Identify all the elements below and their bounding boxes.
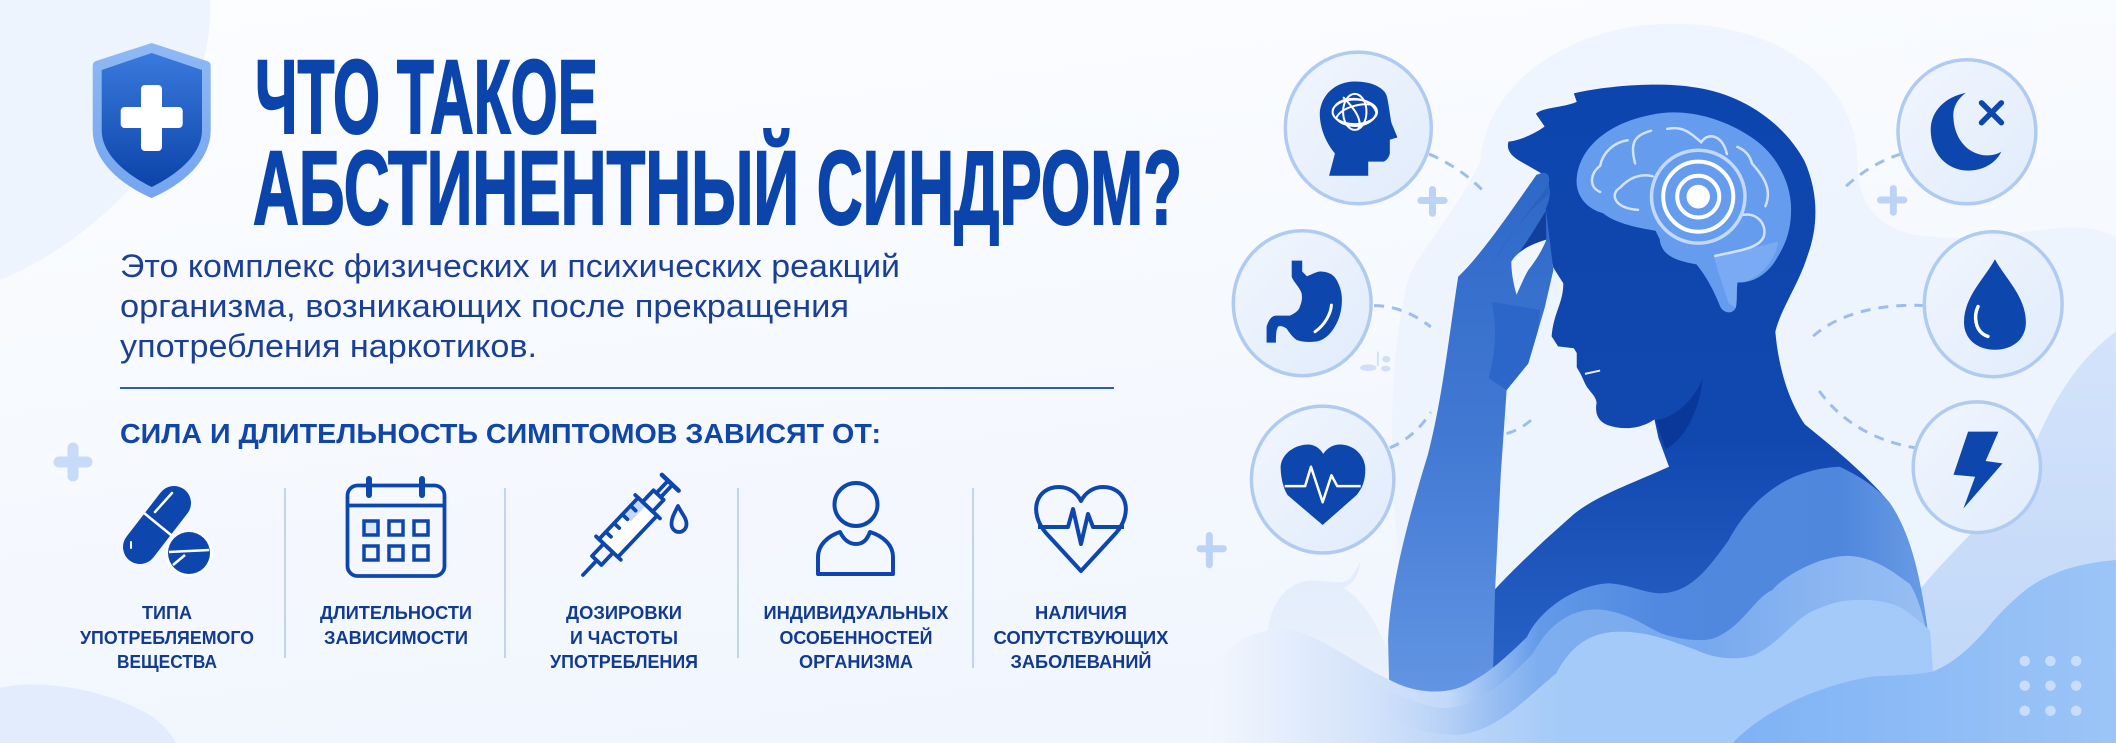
decorative plus left	[59, 448, 87, 476]
front wave right	[1733, 560, 2116, 743]
decorative plus marks	[1200, 189, 1904, 565]
label	[994, 602, 1169, 672]
icon: shield with medical cross	[93, 43, 211, 198]
pain target rings	[1652, 150, 1745, 243]
label: ОСОБЕННОСТЕЙ	[780, 627, 932, 648]
background wave left	[1267, 559, 1399, 743]
title: АБСТИНЕНТНЫЙ СИНДРОМ?	[253, 128, 1182, 247]
title: ЧТО ТАКОЕ	[255, 39, 598, 156]
label: УПОТРЕБЛЕНИЯ	[550, 651, 698, 672]
background blob: top left	[0, 0, 210, 280]
symptom: stomach	[1233, 231, 1371, 376]
icon: calendar	[347, 479, 445, 576]
background wave right	[1901, 332, 2116, 743]
icon: heart with pulse	[1036, 487, 1126, 571]
label	[80, 602, 254, 672]
dashed connectors	[1374, 154, 1924, 448]
label: ЗАВИСИМОСТИ	[324, 627, 468, 648]
decorative small sparkle	[1360, 352, 1390, 371]
intro paragraph	[120, 248, 900, 364]
label: ЗАБОЛЕВАНИЙ	[1010, 651, 1152, 672]
halo behind head	[1392, 24, 2116, 743]
factor: individual features	[764, 483, 949, 672]
label: ВЕЩЕСТВА	[117, 651, 217, 672]
intro paragraph: организма, возникающих после прекращения	[120, 288, 849, 324]
label	[550, 602, 698, 672]
factor: dose and frequency	[550, 471, 698, 672]
label: ОРГАНИЗМА	[799, 651, 913, 672]
torso overlay wave 1	[1208, 467, 1933, 743]
label: ДЛИТЕЛЬНОСТИ	[320, 602, 472, 623]
factor: comorbid diseases	[994, 487, 1169, 672]
factor: substance type	[80, 493, 254, 672]
symptom: confused head	[1285, 52, 1431, 204]
person: head and torso silhouette	[1492, 85, 1933, 678]
neck shadow	[1656, 379, 1702, 449]
lip line	[1585, 371, 1600, 374]
person: arm and hand	[1388, 173, 1553, 711]
label: ДОЗИРОВКИ	[566, 602, 682, 623]
background blob: bottom left	[0, 685, 176, 743]
front wave 3	[1346, 600, 2116, 743]
label: СОПУТСТВУЮЩИХ	[994, 627, 1169, 648]
label	[320, 602, 472, 648]
icon: person	[818, 483, 893, 574]
torso overlay wave 2	[1334, 556, 1933, 743]
intro paragraph: употребления наркотиков.	[120, 328, 537, 364]
icon: pills	[131, 493, 212, 576]
symptom: heart pulse	[1251, 406, 1394, 553]
decorative dots	[2019, 656, 2081, 716]
subheading: СИЛА И ДЛИТЕЛЬНОСТЬ СИМПТОМОВ ЗАВИСЯТ ОТ:	[120, 418, 881, 449]
title	[253, 39, 1182, 247]
label: НАЛИЧИЯ	[1035, 602, 1127, 623]
label	[764, 602, 949, 672]
label: УПОТРЕБЛЯЕМОГО	[80, 627, 254, 648]
factor: duration	[320, 479, 472, 648]
label: ТИПА	[142, 602, 192, 623]
symptom: lightning	[1913, 402, 2041, 533]
label: И ЧАСТОТЫ	[570, 627, 678, 648]
symptom: water drop	[1924, 232, 2062, 377]
illustration panel	[1200, 24, 2116, 743]
brain	[1577, 112, 1791, 312]
symptom: insomnia moon	[1898, 60, 2036, 204]
intro paragraph: Это комплекс физических и психических реакций	[120, 248, 900, 284]
icon: syringe	[571, 471, 686, 587]
label: ИНДИВИДУАЛЬНЫХ	[764, 602, 949, 623]
